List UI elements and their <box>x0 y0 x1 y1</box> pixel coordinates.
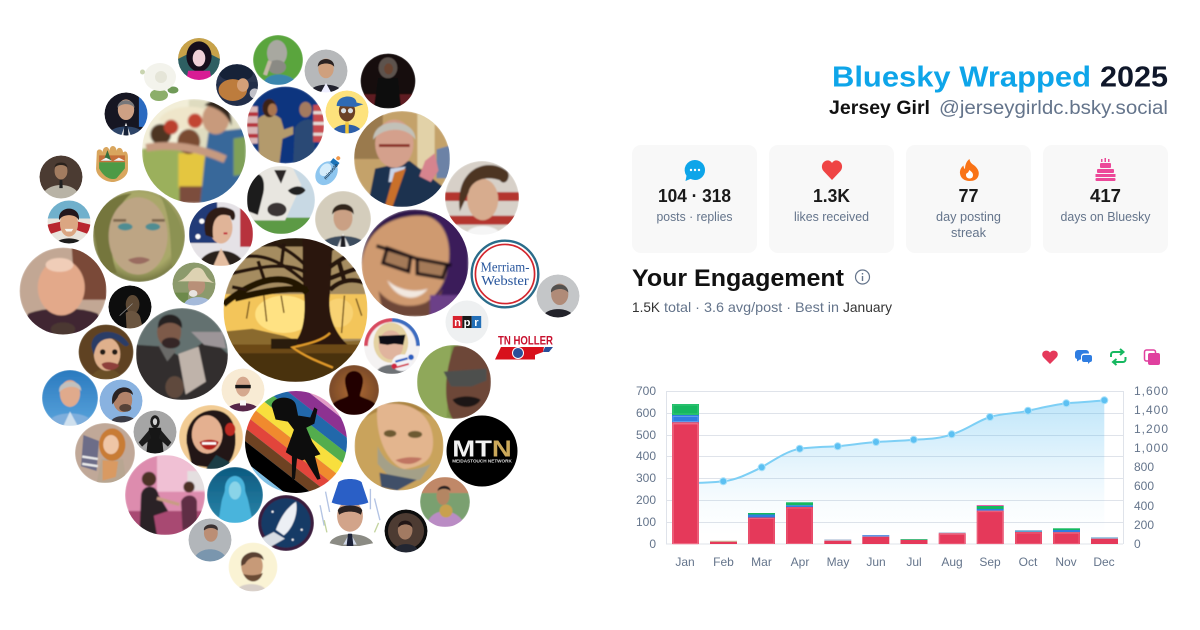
icon: cake <box>1096 158 1116 181</box>
avatar: MTN logo <box>446 416 518 486</box>
avatar: bald man <box>20 248 106 336</box>
avatar: movie still <box>142 99 246 203</box>
stat card: posts and replies: posts · replies <box>656 209 733 224</box>
left axis labels: 600 <box>636 406 656 420</box>
avatar: coconut man <box>420 477 470 527</box>
avatar: Buttigieg <box>100 380 142 422</box>
month labels <box>675 555 1115 569</box>
bar: December <box>1091 537 1118 544</box>
avatar: MTN logo: MEIDASTOUCH NETWORK <box>452 458 513 463</box>
avatar: cow <box>247 166 315 234</box>
avatar: New Year party hat man <box>316 478 384 546</box>
right axis labels: 800 <box>1134 460 1154 474</box>
avatar: man on dark ring <box>384 510 428 552</box>
left axis labels: 100 <box>636 515 656 529</box>
avatar: suited man grey <box>304 50 348 92</box>
avatar: Schumer <box>354 111 450 207</box>
avatar: Merriam-Webster logo <box>472 241 538 307</box>
bar: April <box>786 502 813 544</box>
engagement summary text: January <box>843 299 892 315</box>
avatar: man with suit two <box>315 191 371 247</box>
bar: June <box>862 535 889 544</box>
heading: your engagement: Your Engagement <box>632 265 844 292</box>
engagement summary text: total · 3.6 avg/post · Best in <box>664 299 839 315</box>
avatar: woman in navy cap <box>216 64 260 106</box>
right axis labels: 0 <box>1134 537 1141 551</box>
stat card: posting streak <box>906 145 1031 253</box>
month labels: Mar <box>751 555 772 569</box>
month labels: Jan <box>675 555 695 569</box>
icon: replies legend chat <box>1075 350 1092 364</box>
icon: quotes legend squares <box>1144 350 1160 365</box>
avatar: illustrated woman purple <box>178 38 220 80</box>
avatar: TN Holler logo: TN HOLLER <box>498 336 554 348</box>
avatar: sheriff <box>40 156 82 198</box>
stacked bars <box>672 404 1118 544</box>
avatar: woman with scarf <box>354 402 444 490</box>
bar: February <box>710 541 737 544</box>
avatar: TN Holler logo <box>495 336 554 360</box>
avatar: NPR logo: n <box>454 317 461 329</box>
avatar: blue background man <box>42 370 98 426</box>
avatar: woman in black on stage <box>360 54 416 108</box>
combo chart: monthly engagement <box>636 384 1168 569</box>
title: 2025 <box>1100 62 1168 94</box>
chart legend icons <box>1042 349 1160 365</box>
avatar: sunglasses man <box>417 345 491 419</box>
chart grid <box>666 391 1124 544</box>
month labels: Sep <box>979 555 1001 569</box>
avatar: sunset tree <box>224 238 368 382</box>
avatar: grey man <box>536 274 580 318</box>
avatar: rocket patch <box>258 495 314 551</box>
stat card: likes received: 1.3K <box>813 185 851 206</box>
avatar: hand logo <box>96 146 128 182</box>
bar: August <box>939 532 966 544</box>
stat card: likes received: likes received <box>794 209 869 224</box>
avatar: man reclining with cat <box>136 308 228 400</box>
month labels: Dec <box>1093 555 1115 569</box>
stat card: days on Bluesky: days on Bluesky <box>1060 209 1151 224</box>
avatar: NPR logo: r <box>474 317 479 329</box>
icon: likes legend heart <box>1042 351 1058 364</box>
avatar: MTN logo: MT <box>452 436 492 462</box>
avatar: silhouette placeholder <box>329 365 379 415</box>
avatar: Newsom <box>104 92 148 136</box>
avatar: bearded man with glasses <box>228 542 278 592</box>
right axis labels: 200 <box>1134 518 1154 532</box>
avatar: man grey shirt <box>188 518 232 562</box>
avatar: NPR logo <box>446 300 488 344</box>
avatar: hat man <box>172 262 216 306</box>
avatar: cartoon man in blue hat <box>326 90 368 134</box>
month labels: Aug <box>941 555 963 569</box>
month labels: Feb <box>713 555 734 569</box>
avatar: Maddow <box>48 200 90 244</box>
bar: January <box>672 404 699 544</box>
left axis labels: 200 <box>636 493 656 507</box>
avatar: Merriam-Webster logo: Webster <box>481 273 529 288</box>
bar: May <box>824 539 851 544</box>
avatar: laughing woman <box>179 405 243 469</box>
right axis labels: 1,400 <box>1134 403 1168 417</box>
avatar: rainbow stripes silhouette <box>245 391 347 493</box>
avatar: light bulb <box>311 150 347 190</box>
avatar: Pearl earring child <box>78 324 134 380</box>
right axis labels: 1,600 <box>1134 384 1168 398</box>
bar: November <box>1053 528 1080 544</box>
avatar: red-haired girl with flag <box>75 423 135 483</box>
engagement summary text: 1.5K <box>632 299 661 315</box>
avatar: blonde close up <box>93 190 185 282</box>
left axis labels: 300 <box>636 471 656 485</box>
month labels: May <box>827 555 849 569</box>
avatar: woman in black <box>108 286 152 328</box>
panel: avatar bubble cluster <box>20 35 580 592</box>
stat card: posting streak: streak <box>951 225 986 240</box>
right axis labels: 1,200 <box>1134 422 1168 436</box>
left axis labels: 400 <box>636 449 656 463</box>
avatar: man with dark glasses smiling <box>362 210 468 316</box>
month labels: Nov <box>1055 555 1077 569</box>
icon: heart <box>822 160 842 180</box>
avatar: pink room musicians <box>125 455 205 535</box>
avatar: Merriam-Webster logo: Merriam- <box>481 259 530 274</box>
right axis labels <box>1134 384 1168 551</box>
user name and handle: Jersey Girl <box>829 98 930 119</box>
stat card: days on Bluesky <box>1043 145 1168 253</box>
title: Bluesky Wrapped <box>832 62 1091 94</box>
avatar: woman with flag <box>189 202 253 266</box>
stat card: likes received <box>769 145 894 253</box>
icon: flame <box>960 159 979 181</box>
avatar: white rose <box>140 63 178 101</box>
icon: chat bubble <box>685 160 705 181</box>
left axis labels <box>636 384 656 551</box>
cumulative area <box>685 400 1104 544</box>
bar: September <box>977 505 1004 544</box>
avatar: light bulb: minsolo <box>323 163 340 181</box>
stat card: posts and replies: 104 · 318 <box>658 185 731 206</box>
avatar: NPR logo: p <box>464 317 471 329</box>
month labels: Apr <box>791 555 809 569</box>
avatar: Harris handshake <box>247 86 324 164</box>
user name and handle <box>829 98 1168 119</box>
avatar: blonde with sunglasses <box>364 318 420 374</box>
right axis labels: 400 <box>1134 499 1154 513</box>
avatar: flag man <box>445 161 519 235</box>
right axis labels: 600 <box>1134 479 1154 493</box>
left axis labels: 0 <box>649 537 656 551</box>
avatar: Morticia <box>134 410 176 454</box>
month labels: Jul <box>906 555 922 569</box>
bar: October <box>1015 530 1042 544</box>
avatar: MTN logo: N <box>492 436 512 462</box>
right axis labels: 1,000 <box>1134 441 1168 455</box>
month labels: Jun <box>866 555 886 569</box>
left axis labels: 500 <box>636 428 656 442</box>
avatar: blue hoodie <box>207 467 263 523</box>
icon: reposts legend arrows <box>1111 349 1126 365</box>
avatar: sketched man on green <box>253 35 303 85</box>
bar: March <box>748 513 775 544</box>
user name and handle: @jerseygirldc.bsky.social <box>939 98 1168 119</box>
stat card: days on Bluesky: 417 <box>1090 185 1121 206</box>
bar: July <box>900 539 928 544</box>
icon: info <box>856 270 870 284</box>
left axis labels: 700 <box>636 384 656 398</box>
month labels: Oct <box>1019 555 1038 569</box>
avatar: priest in sunglasses <box>222 368 264 412</box>
stat card: posting streak: 77 <box>958 185 978 206</box>
engagement summary text <box>632 299 892 315</box>
cumulative points <box>720 397 1108 485</box>
stat card: posting streak: day posting <box>936 209 1001 224</box>
cumulative line <box>685 400 1104 483</box>
stat card: posts and replies <box>632 145 757 253</box>
